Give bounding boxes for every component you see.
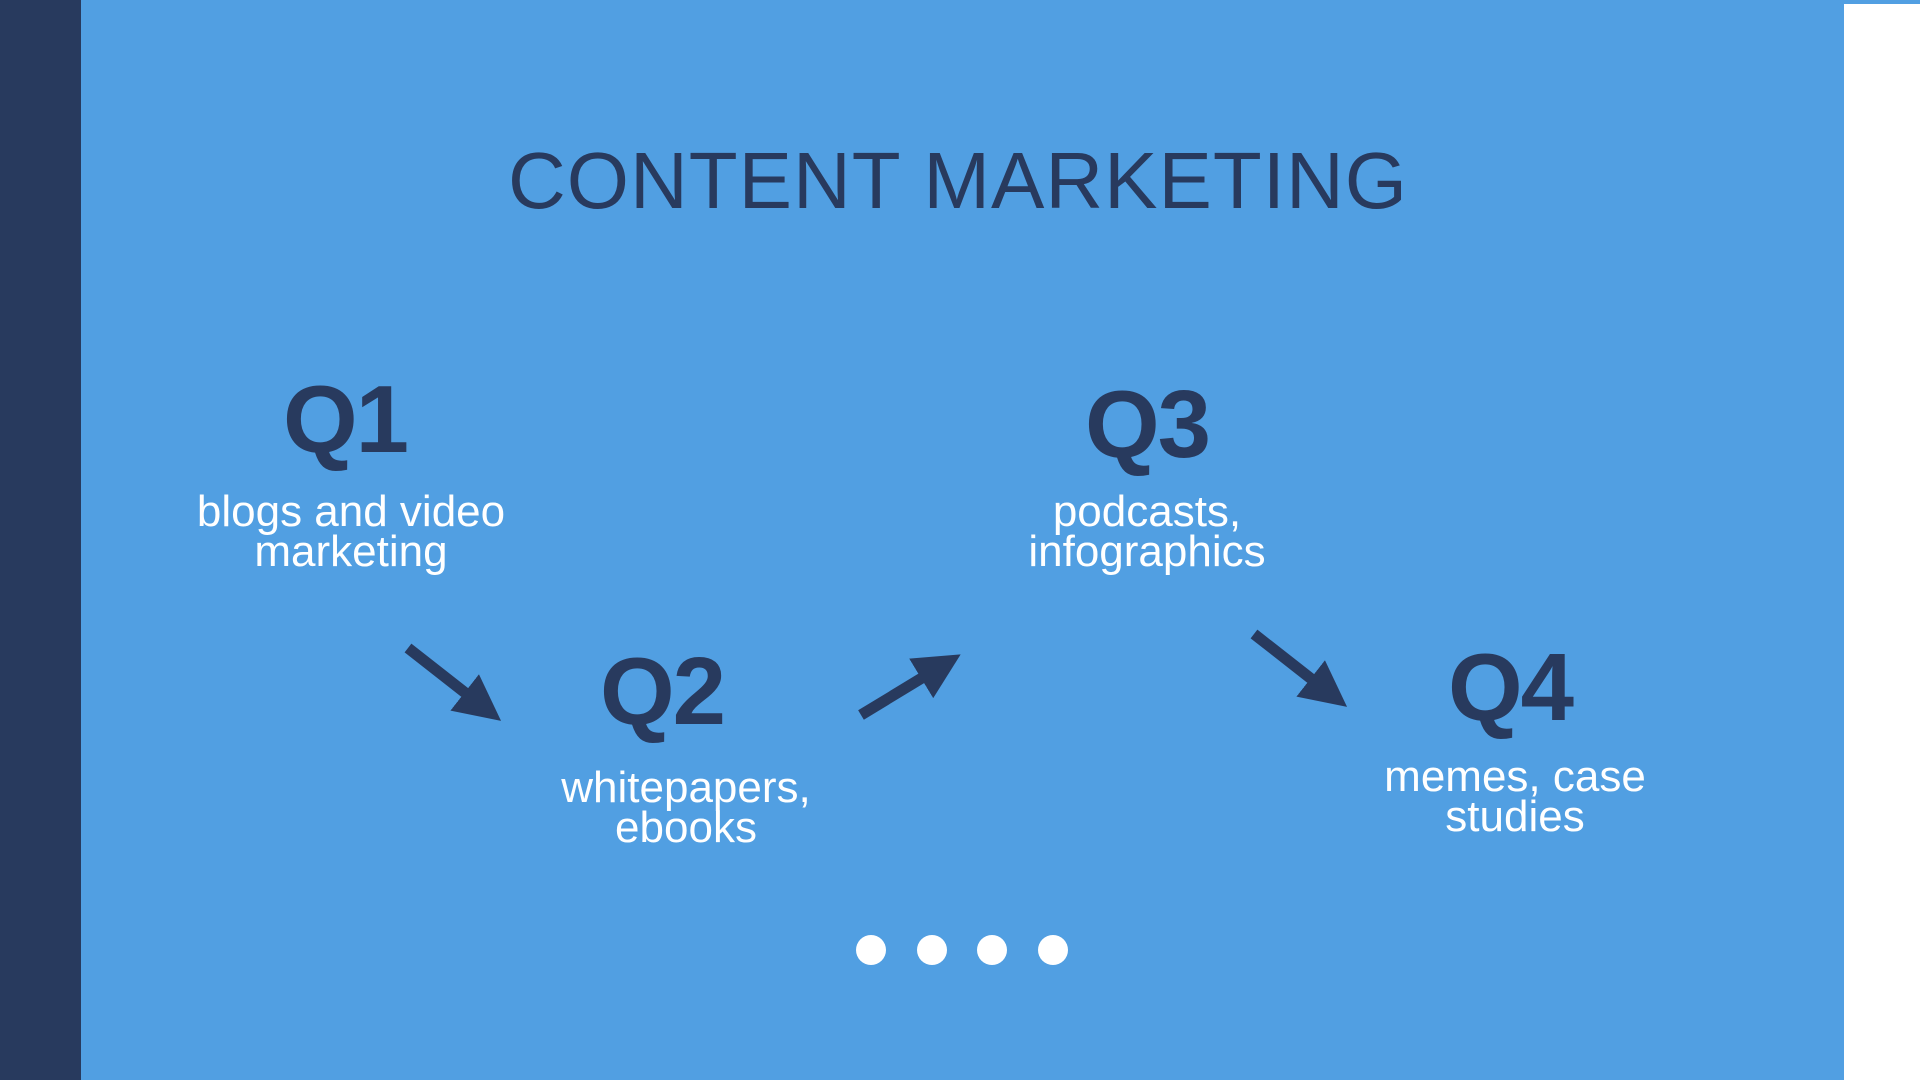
arrow: Q1 to Q2 [408,648,482,706]
Q4 text: memes, case [1384,752,1646,801]
Q1 text: marketing [254,527,448,576]
top-right accent line [1844,0,1920,4]
Q2 heading: Q2 [600,638,724,745]
pagination dots [856,935,1068,965]
arrow: Q2 to Q3 [861,667,940,715]
title: CONTENT MARKETING [508,136,1408,225]
Q3 text: podcasts, [1053,487,1241,536]
Q2 text: ebooks [615,803,757,852]
Q1 text: blogs and video [197,487,505,536]
Q2 text: whitepapers, [561,763,811,812]
Q3 heading: Q3 [1085,371,1209,478]
Q1 heading: Q1 [283,366,407,473]
Q1 text [197,487,505,576]
left dark bar [0,0,81,1080]
Q4 text: studies [1445,792,1585,841]
Q3 text [1028,487,1266,576]
arrow: Q3 to Q4 [1254,634,1328,692]
Q4 heading: Q4 [1448,634,1572,741]
Q2 text [561,763,811,852]
Q4 text [1384,752,1646,841]
Q3 text: infographics [1028,527,1266,576]
